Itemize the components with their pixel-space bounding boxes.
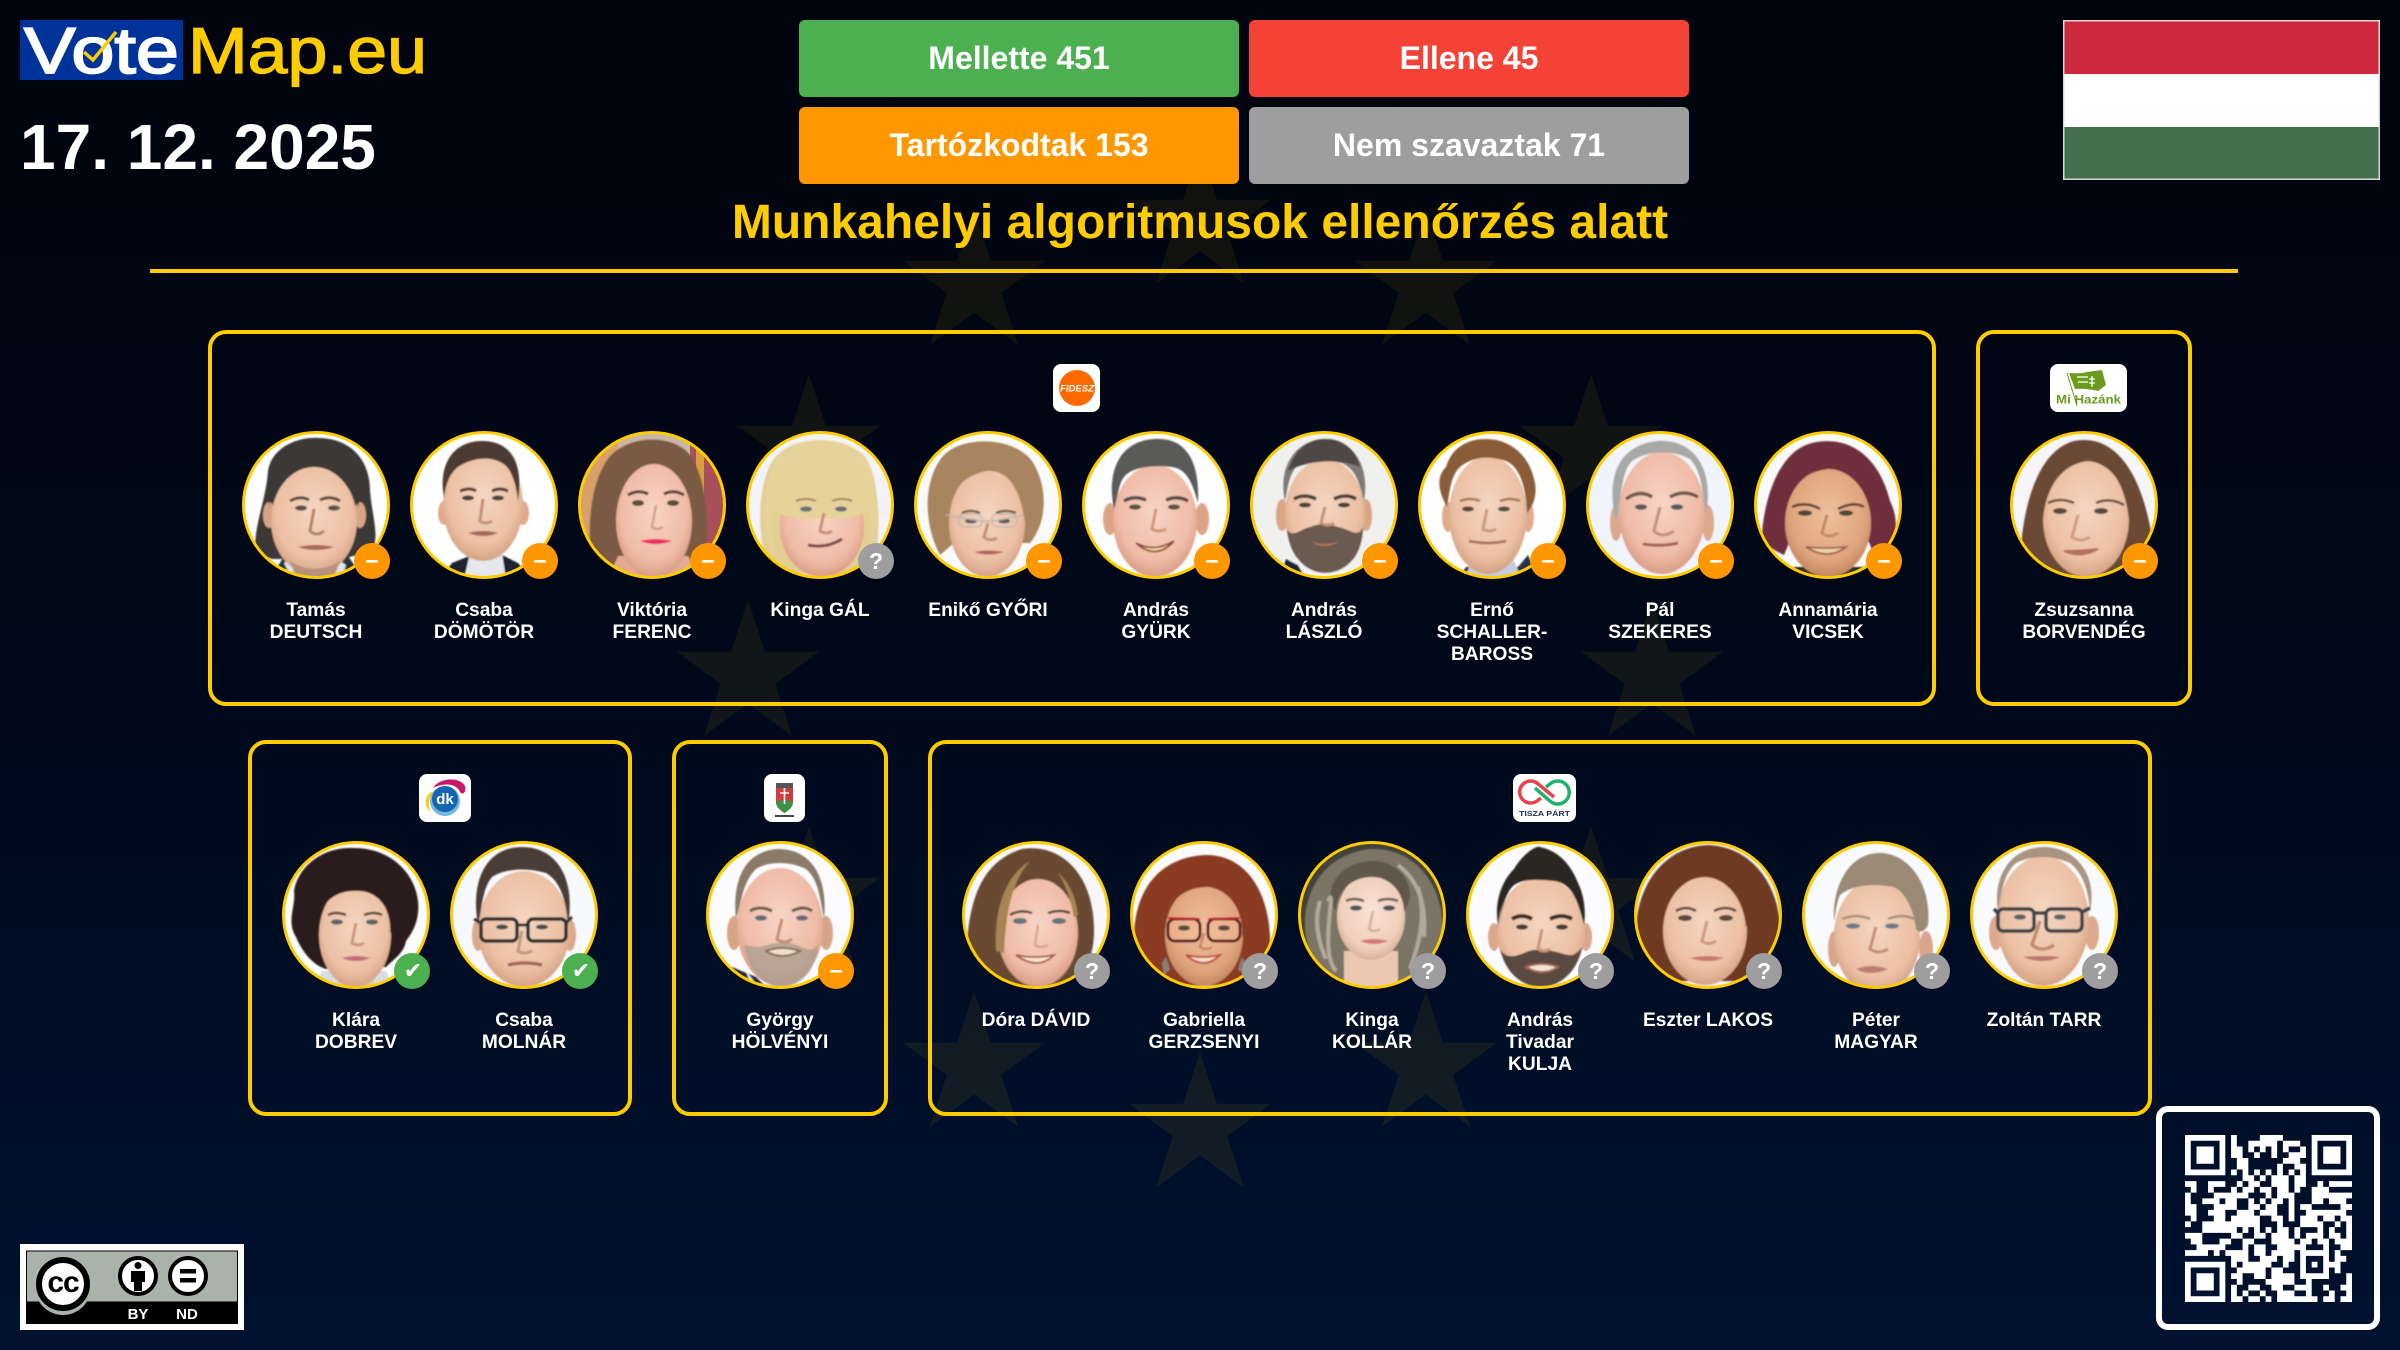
- status badge: [1194, 543, 1230, 579]
- member: Pál Szekeres: [1586, 431, 1734, 643]
- status badge: [1362, 543, 1398, 579]
- member: Viktória Ferenc: [578, 431, 726, 643]
- license badge: CC BY-ND: ND: [176, 1306, 198, 1323]
- panel: KDNP: [672, 740, 888, 1116]
- name: Tamás: [286, 600, 346, 621]
- name: György: [746, 1010, 814, 1031]
- name: SZEKERES: [1608, 622, 1712, 643]
- status badge: −: [2133, 548, 2147, 574]
- status badge: −: [1709, 548, 1723, 574]
- status badge: −: [1541, 548, 1555, 574]
- status badge: [1578, 953, 1614, 989]
- flag: Hungary: [2063, 20, 2380, 180]
- name: [434, 600, 534, 643]
- status badge: ?: [1421, 958, 1435, 984]
- party logo: Mi Hazánk: [2050, 364, 2127, 412]
- party logo: Fidesz: FIDESZ: [1060, 384, 1095, 394]
- name: DEUTSCH: [270, 622, 362, 643]
- status badge: [354, 543, 390, 579]
- name: Pál: [1646, 600, 1674, 621]
- status badge: [1698, 543, 1734, 579]
- member: András Tivadar Kulja: [1466, 841, 1614, 1075]
- status badge: ✔: [572, 959, 590, 984]
- name: Tivadar: [1506, 1032, 1574, 1053]
- member: Dóra Dávid: [962, 841, 1110, 1031]
- status badge: [818, 953, 854, 989]
- name: KOLLÁR: [1332, 1032, 1412, 1053]
- status badge: −: [829, 958, 843, 984]
- party logo: KDNP: [764, 774, 805, 822]
- vote count: abstained: [799, 107, 1239, 184]
- name: Eszter LAKOS: [1643, 1010, 1773, 1031]
- member: György Hölvényi: [706, 841, 854, 1053]
- icon: no derivatives: [170, 1258, 206, 1294]
- icon: attribution: [120, 1258, 156, 1294]
- status badge: ?: [1253, 958, 1267, 984]
- status badge: ?: [1757, 958, 1771, 984]
- name: [1121, 600, 1191, 643]
- status badge: ?: [1589, 958, 1603, 984]
- name: LÁSZLÓ: [1286, 622, 1362, 643]
- QR code: [2156, 1106, 2380, 1330]
- portrait: [242, 431, 390, 579]
- member: András László: [1250, 431, 1398, 643]
- member: Annamária Vicsek: [1754, 431, 1902, 643]
- name: Zsuzsanna: [2034, 600, 2134, 621]
- name: [732, 1010, 828, 1053]
- name: VICSEK: [1792, 622, 1864, 643]
- status badge: [690, 543, 726, 579]
- name: [2022, 600, 2146, 643]
- portrait: [1754, 431, 1902, 579]
- status badge: −: [701, 548, 715, 574]
- portrait: [2010, 431, 2158, 579]
- name: András: [1123, 600, 1189, 621]
- portrait: [1466, 841, 1614, 989]
- member: Enikő Győri: [914, 431, 1062, 621]
- status badge: ✔: [404, 959, 422, 984]
- status badge: [2122, 543, 2158, 579]
- panel: Mi Hazánk: [1976, 330, 2192, 706]
- name: [613, 600, 691, 643]
- panel: DK: [248, 740, 632, 1116]
- vote count: in favour: [799, 20, 1239, 97]
- name: Annamária: [1778, 600, 1878, 621]
- portrait: [706, 841, 854, 989]
- license badge: CC BY-ND: BY: [128, 1306, 148, 1323]
- name: [1332, 1010, 1412, 1053]
- member: Péter Magyar: [1802, 841, 1950, 1053]
- portrait: [1250, 431, 1398, 579]
- portrait: [1586, 431, 1734, 579]
- name: [482, 1010, 566, 1053]
- member: Zsuzsanna Borvendég: [2010, 431, 2158, 643]
- logo: VoteMap.eu: [20, 20, 427, 88]
- vote count: abstained: Tartózkodtak 153: [889, 127, 1149, 163]
- vote count: did not vote: Nem szavaztak 71: [1333, 127, 1605, 163]
- status badge: −: [1205, 548, 1219, 574]
- panel: Tisza: [928, 740, 2152, 1116]
- portrait: [1802, 841, 1950, 989]
- name: [1778, 600, 1878, 643]
- portrait: [1634, 841, 1782, 989]
- name: Ernő: [1470, 600, 1514, 621]
- name: Kinga GÁL: [770, 600, 870, 621]
- portrait: [282, 841, 430, 989]
- member: Csaba Dömötör: [410, 431, 558, 643]
- member: András Gyürk: [1082, 431, 1230, 643]
- name: FERENC: [613, 622, 691, 643]
- name: KULJA: [1508, 1054, 1572, 1075]
- name: [1608, 600, 1712, 643]
- status badge: −: [1373, 548, 1387, 574]
- status badge: ?: [2093, 958, 2107, 984]
- party logo: Tisza: [1513, 774, 1576, 822]
- name: Dóra DÁVID: [982, 1010, 1090, 1031]
- vote count: against: Ellene 45: [1400, 40, 1538, 76]
- name: [1286, 600, 1362, 643]
- status badge: [1746, 953, 1782, 989]
- party logo: DK: [419, 774, 471, 822]
- member: Kinga Gál: [746, 431, 894, 621]
- portrait: [1418, 431, 1566, 579]
- name: Csaba: [495, 1010, 553, 1031]
- status badge: [1026, 543, 1062, 579]
- status badge: ?: [1925, 958, 1939, 984]
- panel: Fidesz: [208, 330, 1936, 706]
- status badge: −: [533, 548, 547, 574]
- vote count: did not vote: [1249, 107, 1689, 184]
- member: Csaba Molnár: [450, 841, 598, 1053]
- name: Gabriella: [1163, 1010, 1245, 1031]
- name: [1149, 1010, 1259, 1053]
- member: Klára Dobrev: [282, 841, 430, 1053]
- name: [270, 600, 362, 643]
- name: Csaba: [455, 600, 513, 621]
- status badge: ?: [1085, 958, 1099, 984]
- name: MOLNÁR: [482, 1032, 566, 1053]
- portrait: [746, 431, 894, 579]
- member: Tamás Deutsch: [242, 431, 390, 643]
- member: Kinga Kollár: [1298, 841, 1446, 1053]
- member: Gabriella Gerzsenyi: [1130, 841, 1278, 1053]
- vote count: against: [1249, 20, 1689, 97]
- icon: CC: [39, 1260, 87, 1308]
- name: Enikő GYŐRI: [928, 600, 1048, 621]
- name: Viktória: [617, 600, 687, 621]
- name: HÖLVÉNYI: [732, 1032, 828, 1053]
- status badge: [394, 953, 430, 989]
- title: Munkahelyi algoritmusok ellenőrzés alatt: [732, 196, 1668, 249]
- portrait: [1970, 841, 2118, 989]
- name: Klára: [332, 1010, 380, 1031]
- name: GERZSENYI: [1149, 1032, 1259, 1053]
- status badge: ?: [869, 548, 883, 574]
- portrait: [1130, 841, 1278, 989]
- name: [1437, 600, 1547, 665]
- status badge: [858, 543, 894, 579]
- portrait: [410, 431, 558, 579]
- name: MAGYAR: [1834, 1032, 1918, 1053]
- status badge: [1866, 543, 1902, 579]
- name: [315, 1010, 397, 1053]
- portrait: [1298, 841, 1446, 989]
- name: Zoltán TARR: [1987, 1010, 2101, 1031]
- license badge: CC BY-ND: [20, 1244, 244, 1330]
- member: Zoltán Tarr: [1970, 841, 2118, 1031]
- status badge: −: [365, 548, 379, 574]
- name: BORVENDÉG: [2022, 622, 2146, 643]
- title divider: [150, 269, 2238, 273]
- portrait: [962, 841, 1110, 989]
- name: BAROSS: [1451, 644, 1533, 665]
- portrait: [1082, 431, 1230, 579]
- name: SCHALLER-: [1437, 622, 1547, 643]
- name: [1834, 1010, 1918, 1053]
- status badge: [1074, 953, 1110, 989]
- status badge: [522, 543, 558, 579]
- name: Kinga: [1345, 1010, 1399, 1031]
- status badge: [1530, 543, 1566, 579]
- party logo: DK: dk: [436, 791, 454, 808]
- date: 17. 12. 2025: [20, 111, 376, 183]
- name: András: [1507, 1010, 1573, 1031]
- member: Eszter Lakos: [1634, 841, 1782, 1031]
- status badge: [1410, 953, 1446, 989]
- name: Péter: [1852, 1010, 1900, 1031]
- status badge: [1242, 953, 1278, 989]
- party logo: Mi Hazánk: Mi Hazánk: [2056, 394, 2122, 406]
- portrait: [914, 431, 1062, 579]
- status badge: −: [1037, 548, 1051, 574]
- name: [1506, 1010, 1574, 1075]
- name: GYÜRK: [1121, 622, 1191, 643]
- name: DÖMÖTÖR: [434, 622, 534, 643]
- party logo: Tisza: TISZA PÁRT: [1519, 809, 1570, 818]
- vote count: in favour: Mellette 451: [928, 40, 1110, 76]
- status badge: [562, 953, 598, 989]
- status badge: [2082, 953, 2118, 989]
- name: András: [1291, 600, 1357, 621]
- member: Ernő Schaller-Baross: [1418, 431, 1566, 665]
- status badge: −: [1877, 548, 1891, 574]
- portrait: [578, 431, 726, 579]
- name: DOBREV: [315, 1032, 397, 1053]
- icon: CC: cc: [47, 1266, 79, 1299]
- portrait: [450, 841, 598, 989]
- party logo: Fidesz: [1053, 364, 1100, 412]
- status badge: [1914, 953, 1950, 989]
